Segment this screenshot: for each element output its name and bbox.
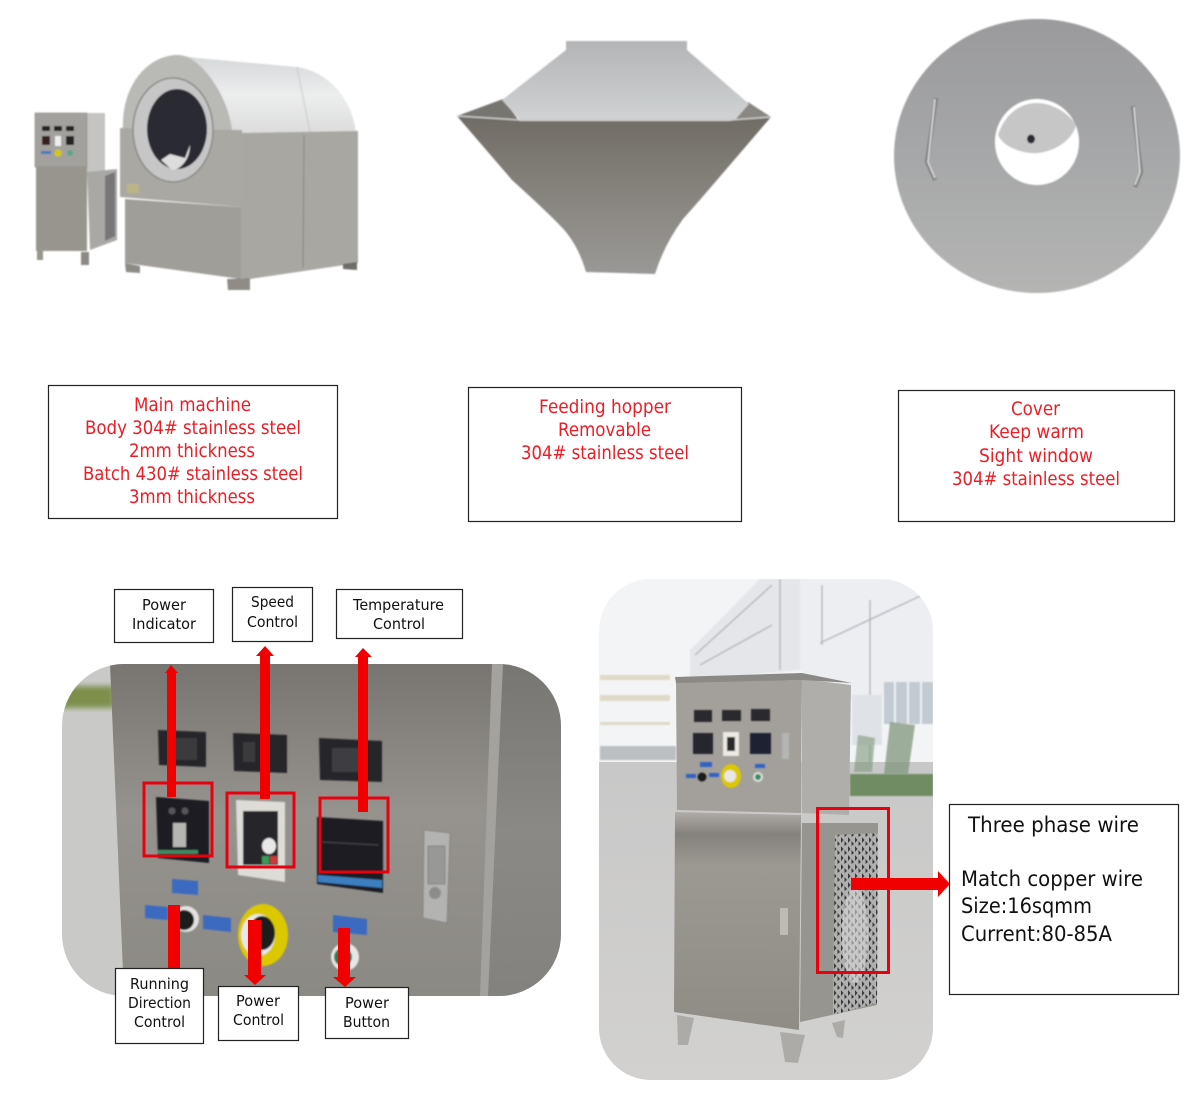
panel: main machine specs: 3mm thickness xyxy=(129,486,255,508)
label: temperature control: Temperature xyxy=(352,596,444,614)
label: running direction control xyxy=(116,968,204,1044)
photo: cover xyxy=(894,19,1180,293)
label: speed control: Control xyxy=(247,613,298,631)
photo: main machine xyxy=(35,55,358,290)
photo: control panel close-up xyxy=(58,664,561,996)
label: power indicator: Power xyxy=(142,596,187,614)
label: power indicator xyxy=(114,590,214,642)
panel: three phase wire specs xyxy=(950,804,1178,994)
label: power button: Button xyxy=(343,1013,390,1031)
panel: cover specs: Keep warm xyxy=(989,421,1084,443)
label: power control xyxy=(218,986,298,1040)
panel: main machine specs: Body 304# stainless steel xyxy=(85,417,301,439)
control cabinet xyxy=(35,113,117,265)
label: temperature control: Control xyxy=(373,615,425,633)
label: running direction control: Control xyxy=(134,1013,185,1031)
label: temperature control xyxy=(336,590,462,638)
panel: cover specs: 304# stainless steel xyxy=(952,468,1120,490)
label: speed control xyxy=(232,588,312,642)
label: running direction control: Running xyxy=(130,975,189,993)
panel: main machine specs: Batch 430# stainless steel xyxy=(83,463,303,485)
speed module xyxy=(236,800,285,882)
door lock xyxy=(423,830,450,923)
label: power button: Power xyxy=(345,994,390,1012)
panel: feeding hopper specs: 304# stainless steel xyxy=(521,442,689,464)
panel: cover specs xyxy=(898,390,1174,522)
panel: feeding hopper specs: Feeding hopper xyxy=(539,396,671,418)
label: power button xyxy=(326,988,408,1038)
top indicators xyxy=(158,730,382,782)
label: power control: Control xyxy=(233,1011,284,1029)
panel: three phase wire specs: Three phase wire xyxy=(967,813,1139,837)
photo: feeding hopper xyxy=(457,41,771,274)
power module xyxy=(156,797,209,863)
panel: three phase wire specs: Size:16sqmm xyxy=(961,894,1092,918)
label: running direction control: Direction xyxy=(128,994,191,1012)
cabinet body xyxy=(674,673,852,1030)
blue labels and switches xyxy=(145,879,367,971)
panel: main machine specs: Main machine xyxy=(134,394,251,416)
label: power indicator: Indicator xyxy=(132,615,197,633)
panel: feeding hopper specs xyxy=(468,388,742,522)
panel: cover specs: Sight window xyxy=(979,445,1093,467)
temperature module xyxy=(317,817,383,893)
red highlight frame and arrow: wire inlet xyxy=(818,808,950,972)
panel: three phase wire specs: Match copper wire xyxy=(961,867,1143,891)
panel: main machine specs xyxy=(48,386,338,518)
cabinet controls xyxy=(686,709,789,788)
cabinet legs xyxy=(677,1015,845,1063)
panel: main machine specs: 2mm thickness xyxy=(129,440,255,462)
panel: feeding hopper specs: Removable xyxy=(558,419,651,441)
red highlight frames and arrows: control panel xyxy=(144,646,388,987)
photo: electrical cabinet outdoors xyxy=(599,579,933,1080)
fan box with mesh xyxy=(800,823,878,1022)
panel: cover specs: Cover xyxy=(1011,398,1060,420)
label: speed control: Speed xyxy=(251,593,294,611)
label: power control: Power xyxy=(236,992,281,1010)
roaster drum xyxy=(120,55,358,290)
panel: three phase wire specs: Current:80-85A xyxy=(961,922,1113,946)
